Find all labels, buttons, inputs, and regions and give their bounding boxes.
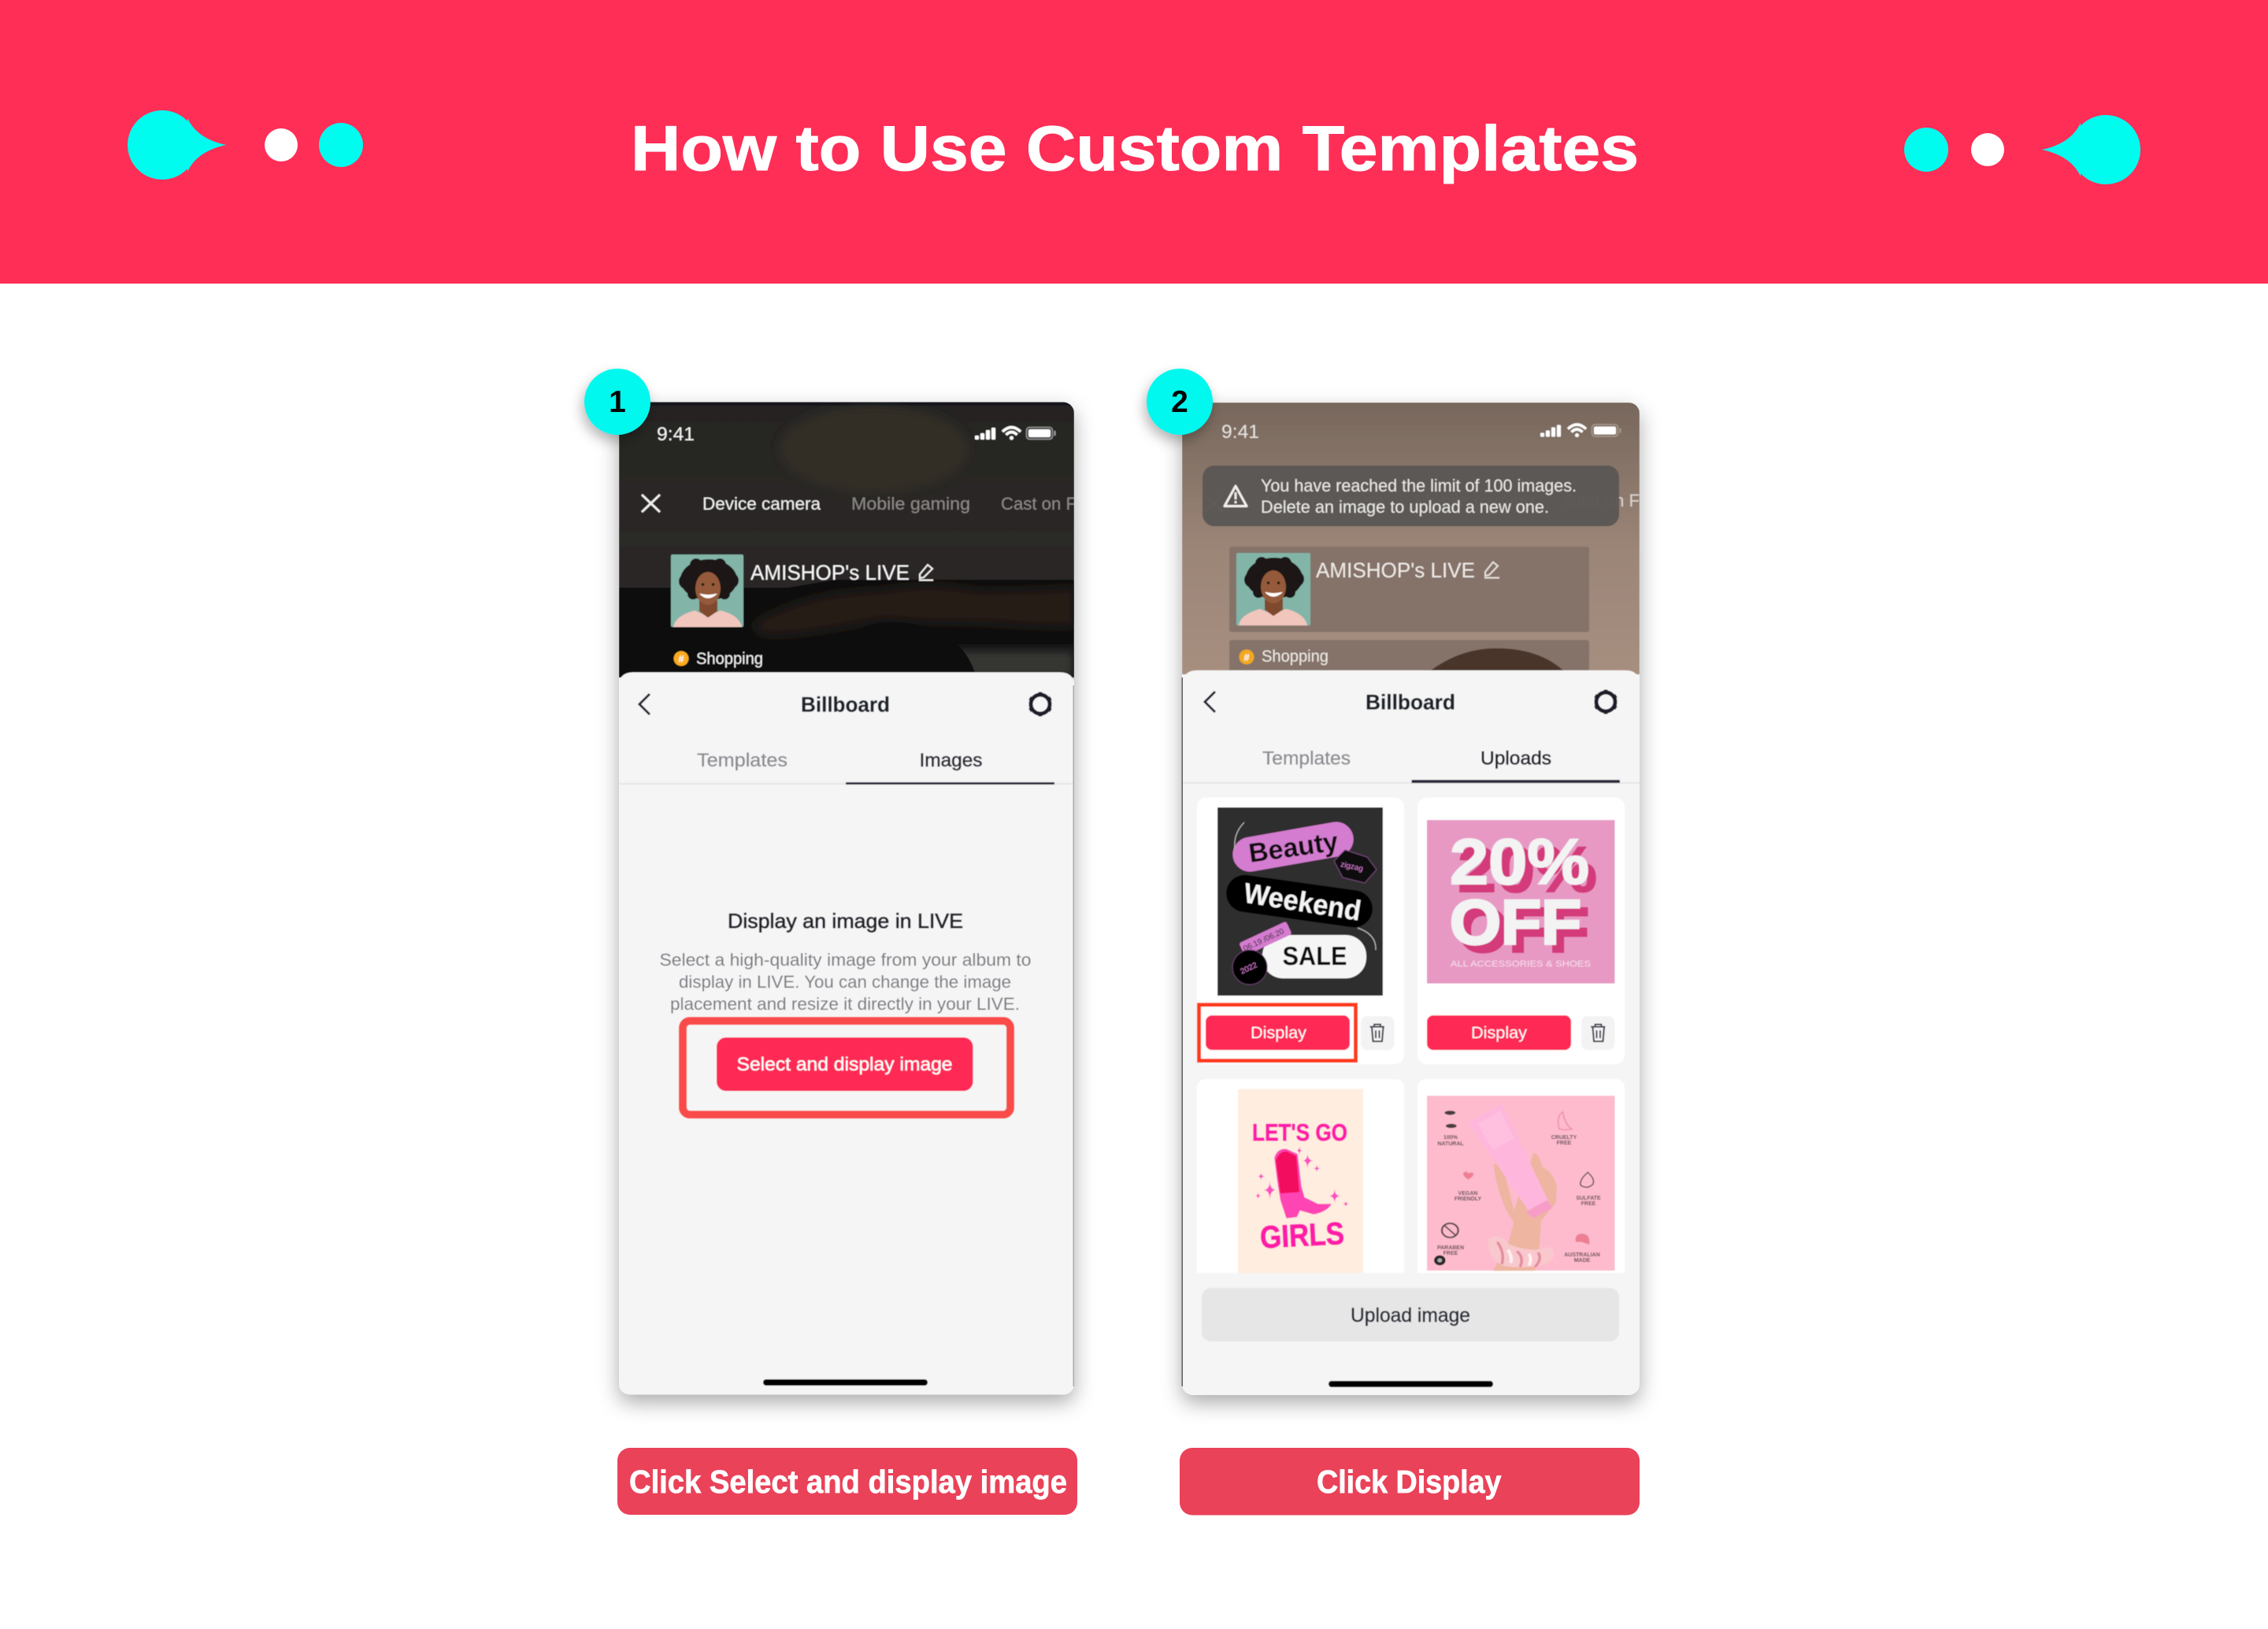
button: select and display image bbox=[717, 1037, 973, 1091]
settings gear bbox=[1595, 690, 1616, 714]
poster: beauty weekend sale bbox=[1217, 807, 1383, 996]
benefit labels: VEGAN bbox=[1458, 1191, 1477, 1197]
poster: beauty weekend sale: 06.19 /06.20 bbox=[1242, 927, 1286, 953]
status bar time: 9:41 bbox=[657, 424, 695, 445]
template card 3 bbox=[1197, 1079, 1404, 1273]
faded source tabs behind alert: Device camera bbox=[1266, 491, 1385, 510]
shopping tag: # bbox=[678, 653, 684, 665]
title: How to Use Custom Templates bbox=[631, 113, 1639, 184]
sheet title: Billboard bbox=[801, 693, 890, 717]
faded source tabs behind alert: Mobile gaming bbox=[1415, 491, 1534, 510]
home indicator bbox=[763, 1379, 928, 1386]
pencil icon bbox=[919, 565, 933, 580]
empty state description bbox=[660, 950, 1032, 1014]
back chevron bbox=[639, 694, 650, 714]
highlight frame bbox=[683, 1021, 1010, 1115]
benefit labels: SULFATE bbox=[1576, 1196, 1601, 1201]
decoration: left speech balloon and dots bbox=[128, 110, 363, 180]
phone 1 shadow card bbox=[619, 402, 1074, 1394]
camera background photo bbox=[619, 402, 1074, 677]
avatar photo bbox=[1236, 553, 1310, 625]
button: upload image bbox=[1202, 1288, 1619, 1341]
phone 2 screen bbox=[1182, 403, 1640, 1395]
poster: let's go girls bbox=[1238, 1089, 1363, 1273]
poster: beauty weekend sale: Beauty bbox=[1247, 826, 1340, 869]
caption: step 1 bbox=[617, 1448, 1077, 1515]
poster: pink product tube bbox=[1427, 1096, 1614, 1271]
benefit labels: NATURAL bbox=[1437, 1141, 1464, 1147]
poster: beauty weekend sale: Weekend bbox=[1242, 877, 1363, 927]
camera background photo bbox=[1182, 403, 1640, 674]
empty state description: display in LIVE. You can change the image bbox=[679, 972, 1011, 992]
button: display: Display bbox=[1251, 1024, 1307, 1042]
badge: step 1: 1 bbox=[609, 385, 626, 419]
close icon bbox=[642, 495, 660, 512]
alert message bbox=[1261, 476, 1577, 517]
shopping tag: Shopping bbox=[1262, 648, 1329, 666]
highlight frame bbox=[1199, 1005, 1356, 1060]
badge: step 1 bbox=[584, 369, 650, 435]
benefit labels: FREE bbox=[1557, 1141, 1572, 1146]
source tab: mobile gaming: Mobile gaming bbox=[851, 494, 970, 514]
caption: step 1: Click Select and display image bbox=[629, 1464, 1067, 1500]
benefit labels: FREE bbox=[1581, 1201, 1596, 1207]
status icons bbox=[1540, 425, 1621, 437]
poster: 20% off: 20% bbox=[1450, 826, 1589, 898]
tab: uploads: Uploads bbox=[1480, 748, 1551, 769]
header banner bbox=[0, 0, 2268, 284]
boot and sparkles bbox=[1255, 1146, 1349, 1219]
shopping tag: # bbox=[1243, 651, 1250, 663]
live title: AMISHOP's LIVE bbox=[750, 561, 910, 584]
phone 2 shadow card bbox=[1182, 403, 1640, 1395]
source tab: device camera: Device camera bbox=[702, 494, 821, 514]
poster: let's go girls: GIRLS bbox=[1259, 1216, 1345, 1256]
template card 1 bbox=[1197, 797, 1404, 1064]
sheet title: Billboard bbox=[1366, 690, 1455, 714]
benefit labels: MADE bbox=[1574, 1258, 1591, 1263]
warning icon bbox=[1225, 486, 1247, 506]
tab: templates: Templates bbox=[697, 750, 788, 771]
button: upload image: Upload image bbox=[1351, 1304, 1470, 1327]
poster: 20% off: 20% bbox=[1458, 834, 1597, 906]
benefit labels: CRUELTY bbox=[1551, 1135, 1577, 1141]
poster: 20% off: OFF bbox=[1450, 887, 1581, 957]
faded source tabs behind alert bbox=[1205, 491, 1640, 512]
delete button bbox=[1581, 1016, 1614, 1050]
alert toast bbox=[1203, 466, 1619, 526]
live title: AMISHOP's LIVE bbox=[1316, 558, 1475, 582]
benefit labels bbox=[1437, 1135, 1601, 1263]
poster: 20% off: OFF bbox=[1458, 895, 1589, 965]
active tab underline bbox=[1411, 780, 1620, 783]
poster: beauty weekend sale: 2022 bbox=[1240, 961, 1259, 976]
avatar photo bbox=[671, 555, 743, 627]
button: display: Display bbox=[1471, 1024, 1528, 1042]
shopping tag: Shopping bbox=[696, 650, 763, 668]
benefit labels: 100% bbox=[1443, 1135, 1458, 1141]
status bar time: 9:41 bbox=[1221, 421, 1259, 443]
benefit labels: FRIENDLY bbox=[1455, 1197, 1482, 1202]
benefit labels: AUSTRALIAN bbox=[1564, 1252, 1600, 1258]
poster: beauty weekend sale: SALE bbox=[1282, 941, 1347, 970]
tab: images: Images bbox=[920, 750, 983, 771]
alert message: You have reached the limit of 100 images. bbox=[1261, 476, 1577, 495]
button: display bbox=[1206, 1015, 1350, 1050]
category field backdrop bbox=[1229, 640, 1589, 676]
benefit labels: PARABEN bbox=[1437, 1245, 1464, 1251]
source tab: cast: Cast on F bbox=[1001, 494, 1077, 514]
delete button bbox=[1361, 1016, 1394, 1050]
faded source tabs behind alert: Cast on F bbox=[1564, 491, 1640, 510]
pencil icon bbox=[1484, 562, 1499, 578]
hair in background photo bbox=[1424, 648, 1569, 676]
active tab underline bbox=[846, 782, 1054, 785]
home indicator bbox=[1329, 1381, 1493, 1387]
poster: let's go girls: LET'S GO bbox=[1252, 1119, 1347, 1146]
poster: 20% off: ALL ACCESSORIES & SHOES bbox=[1451, 959, 1591, 969]
benefit labels: FREE bbox=[1443, 1251, 1458, 1256]
button: select and display image: Select and display image bbox=[737, 1054, 953, 1075]
bottom sheet bbox=[1183, 670, 1640, 1395]
badge: step 2 bbox=[1147, 369, 1213, 435]
template card 2 bbox=[1418, 797, 1625, 1064]
sheet footer background bbox=[1183, 1273, 1640, 1395]
poster: beauty weekend sale: zigzag bbox=[1340, 860, 1364, 874]
empty state description: placement and resize it directly in your LIVE. bbox=[670, 994, 1020, 1014]
empty state description: Select a high-quality image from your album to bbox=[660, 950, 1032, 970]
hand and tube bbox=[1434, 1104, 1593, 1271]
tab: templates: Templates bbox=[1262, 748, 1351, 769]
poster: 20% off bbox=[1427, 820, 1614, 983]
bottom sheet bbox=[619, 673, 1074, 1395]
settings gear bbox=[1030, 692, 1051, 717]
badge: step 2: 2 bbox=[1171, 385, 1188, 419]
phone 1 screen bbox=[619, 402, 1077, 1395]
caption: step 2: Click Display bbox=[1317, 1464, 1502, 1500]
empty state heading: Display an image in LIVE bbox=[728, 909, 963, 933]
alert message: Delete an image to upload a new one. bbox=[1261, 497, 1549, 517]
title field backdrop bbox=[1229, 547, 1589, 632]
decoration: right dots and speech balloon bbox=[1904, 115, 2140, 184]
back chevron bbox=[1205, 692, 1215, 712]
template card 4 bbox=[1418, 1079, 1625, 1273]
button: display bbox=[1427, 1015, 1571, 1050]
status icons bbox=[975, 427, 1055, 440]
caption: step 2 bbox=[1180, 1448, 1640, 1516]
